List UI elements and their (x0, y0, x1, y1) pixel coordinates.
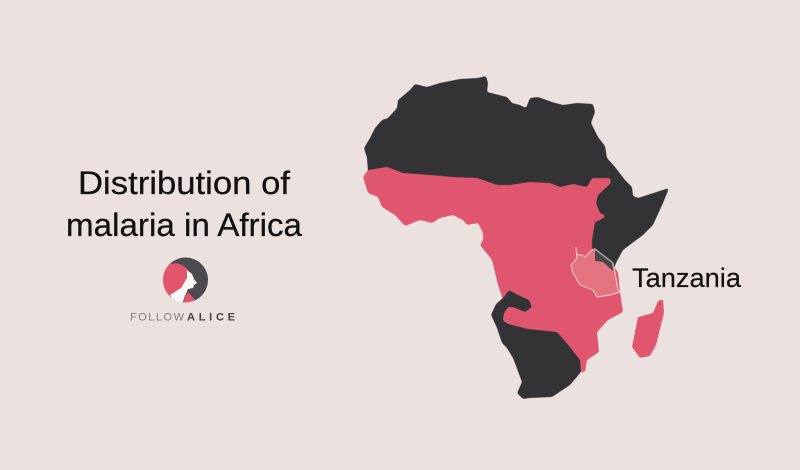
region: malaria distribution (363, 167, 623, 372)
Tanzania highlight (571, 248, 620, 297)
region: no malaria, north and horn of Africa (364, 76, 669, 275)
Madagascar (632, 299, 664, 358)
logo: Follow Alice (130, 257, 235, 324)
logo emblem (163, 258, 208, 302)
title: Distribution of (78, 165, 290, 201)
infographic canvas (68, 76, 742, 399)
region: no malaria, southern Africa (491, 290, 581, 399)
logo wordmark: FOLLOW (130, 312, 185, 324)
label: Tanzania: Tanzania (632, 263, 742, 293)
title (66, 165, 302, 243)
title: malaria in Africa (66, 207, 302, 243)
logo wordmark: ALICE (187, 312, 235, 324)
logo wordmark (130, 312, 235, 324)
map of Africa (363, 76, 669, 399)
